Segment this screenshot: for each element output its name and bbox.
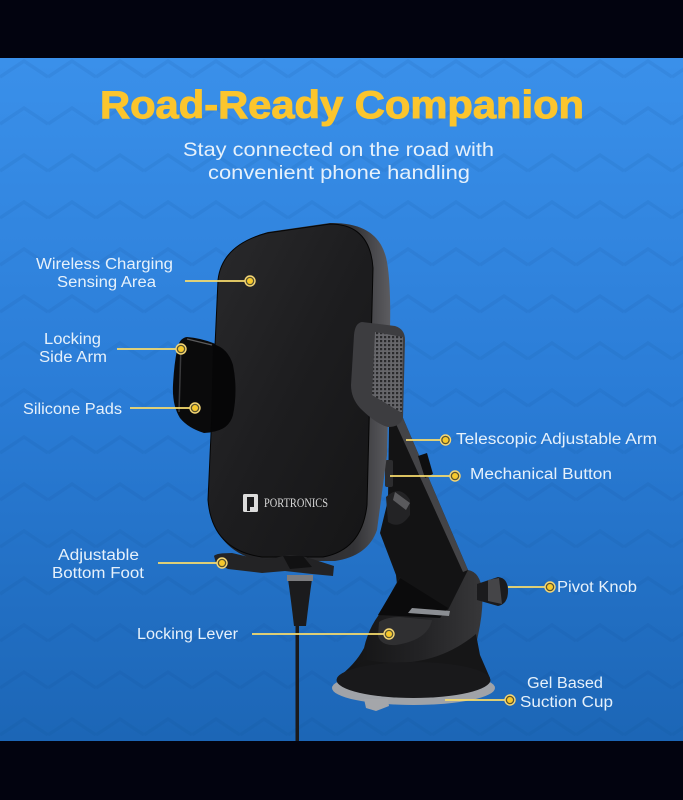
callout: pivot knob	[508, 579, 637, 596]
callout: gel based suction cup: Suction Cup	[520, 694, 613, 711]
callout: telescopic adjustable arm: Telescopic Adjustable Arm	[456, 431, 657, 448]
callout: adjustable bottom foot: Bottom Foot	[52, 565, 145, 582]
callout: silicone pads	[23, 401, 200, 418]
top black band	[0, 0, 683, 58]
subtitle: Stay connected on the road with	[183, 139, 494, 161]
callout: gel based suction cup	[445, 675, 613, 711]
callout: adjustable bottom foot	[52, 547, 227, 582]
right side arm with mesh	[351, 322, 405, 427]
product: car phone holder	[173, 223, 508, 741]
telescopic arm	[380, 418, 470, 612]
callout: mechanical button: Mechanical Button	[470, 466, 612, 483]
mechanical button	[385, 460, 393, 487]
brand logo	[243, 494, 328, 512]
callout: gel based suction cup: Gel Based	[527, 675, 603, 692]
adjustable bottom foot	[214, 553, 334, 576]
brand logo: PORTRONICS	[264, 496, 328, 510]
callout: adjustable bottom foot: Adjustable	[58, 547, 139, 564]
holder front face	[208, 224, 373, 557]
title: Road-Ready Companion	[100, 84, 584, 127]
callout: locking lever	[137, 626, 394, 643]
callout: mechanical button	[390, 466, 612, 483]
subtitle: convenient phone handling	[208, 162, 470, 184]
callout: locking side arm: Locking	[44, 331, 101, 348]
side arm pad shadow over face	[211, 344, 236, 432]
callout: locking side arm: Side Arm	[39, 349, 107, 366]
base dome	[337, 570, 490, 680]
left locking side arm	[173, 337, 236, 433]
callout: wireless charging sensing area: Wireless Charging	[36, 256, 173, 273]
cable	[287, 575, 313, 741]
subtitle	[183, 139, 494, 184]
gel suction cup	[332, 662, 495, 711]
bottom black band	[0, 741, 683, 800]
holder outer frame	[208, 223, 390, 561]
callout: locking lever: Locking Lever	[137, 626, 238, 643]
callout: silicone pads: Silicone Pads	[23, 401, 122, 418]
callout: pivot knob: Pivot Knob	[557, 579, 637, 596]
callout: wireless charging sensing area: Sensing Area	[57, 274, 156, 291]
pivot knob	[477, 577, 508, 606]
callout: wireless charging sensing area	[36, 256, 255, 291]
callout: locking side arm	[39, 331, 186, 366]
